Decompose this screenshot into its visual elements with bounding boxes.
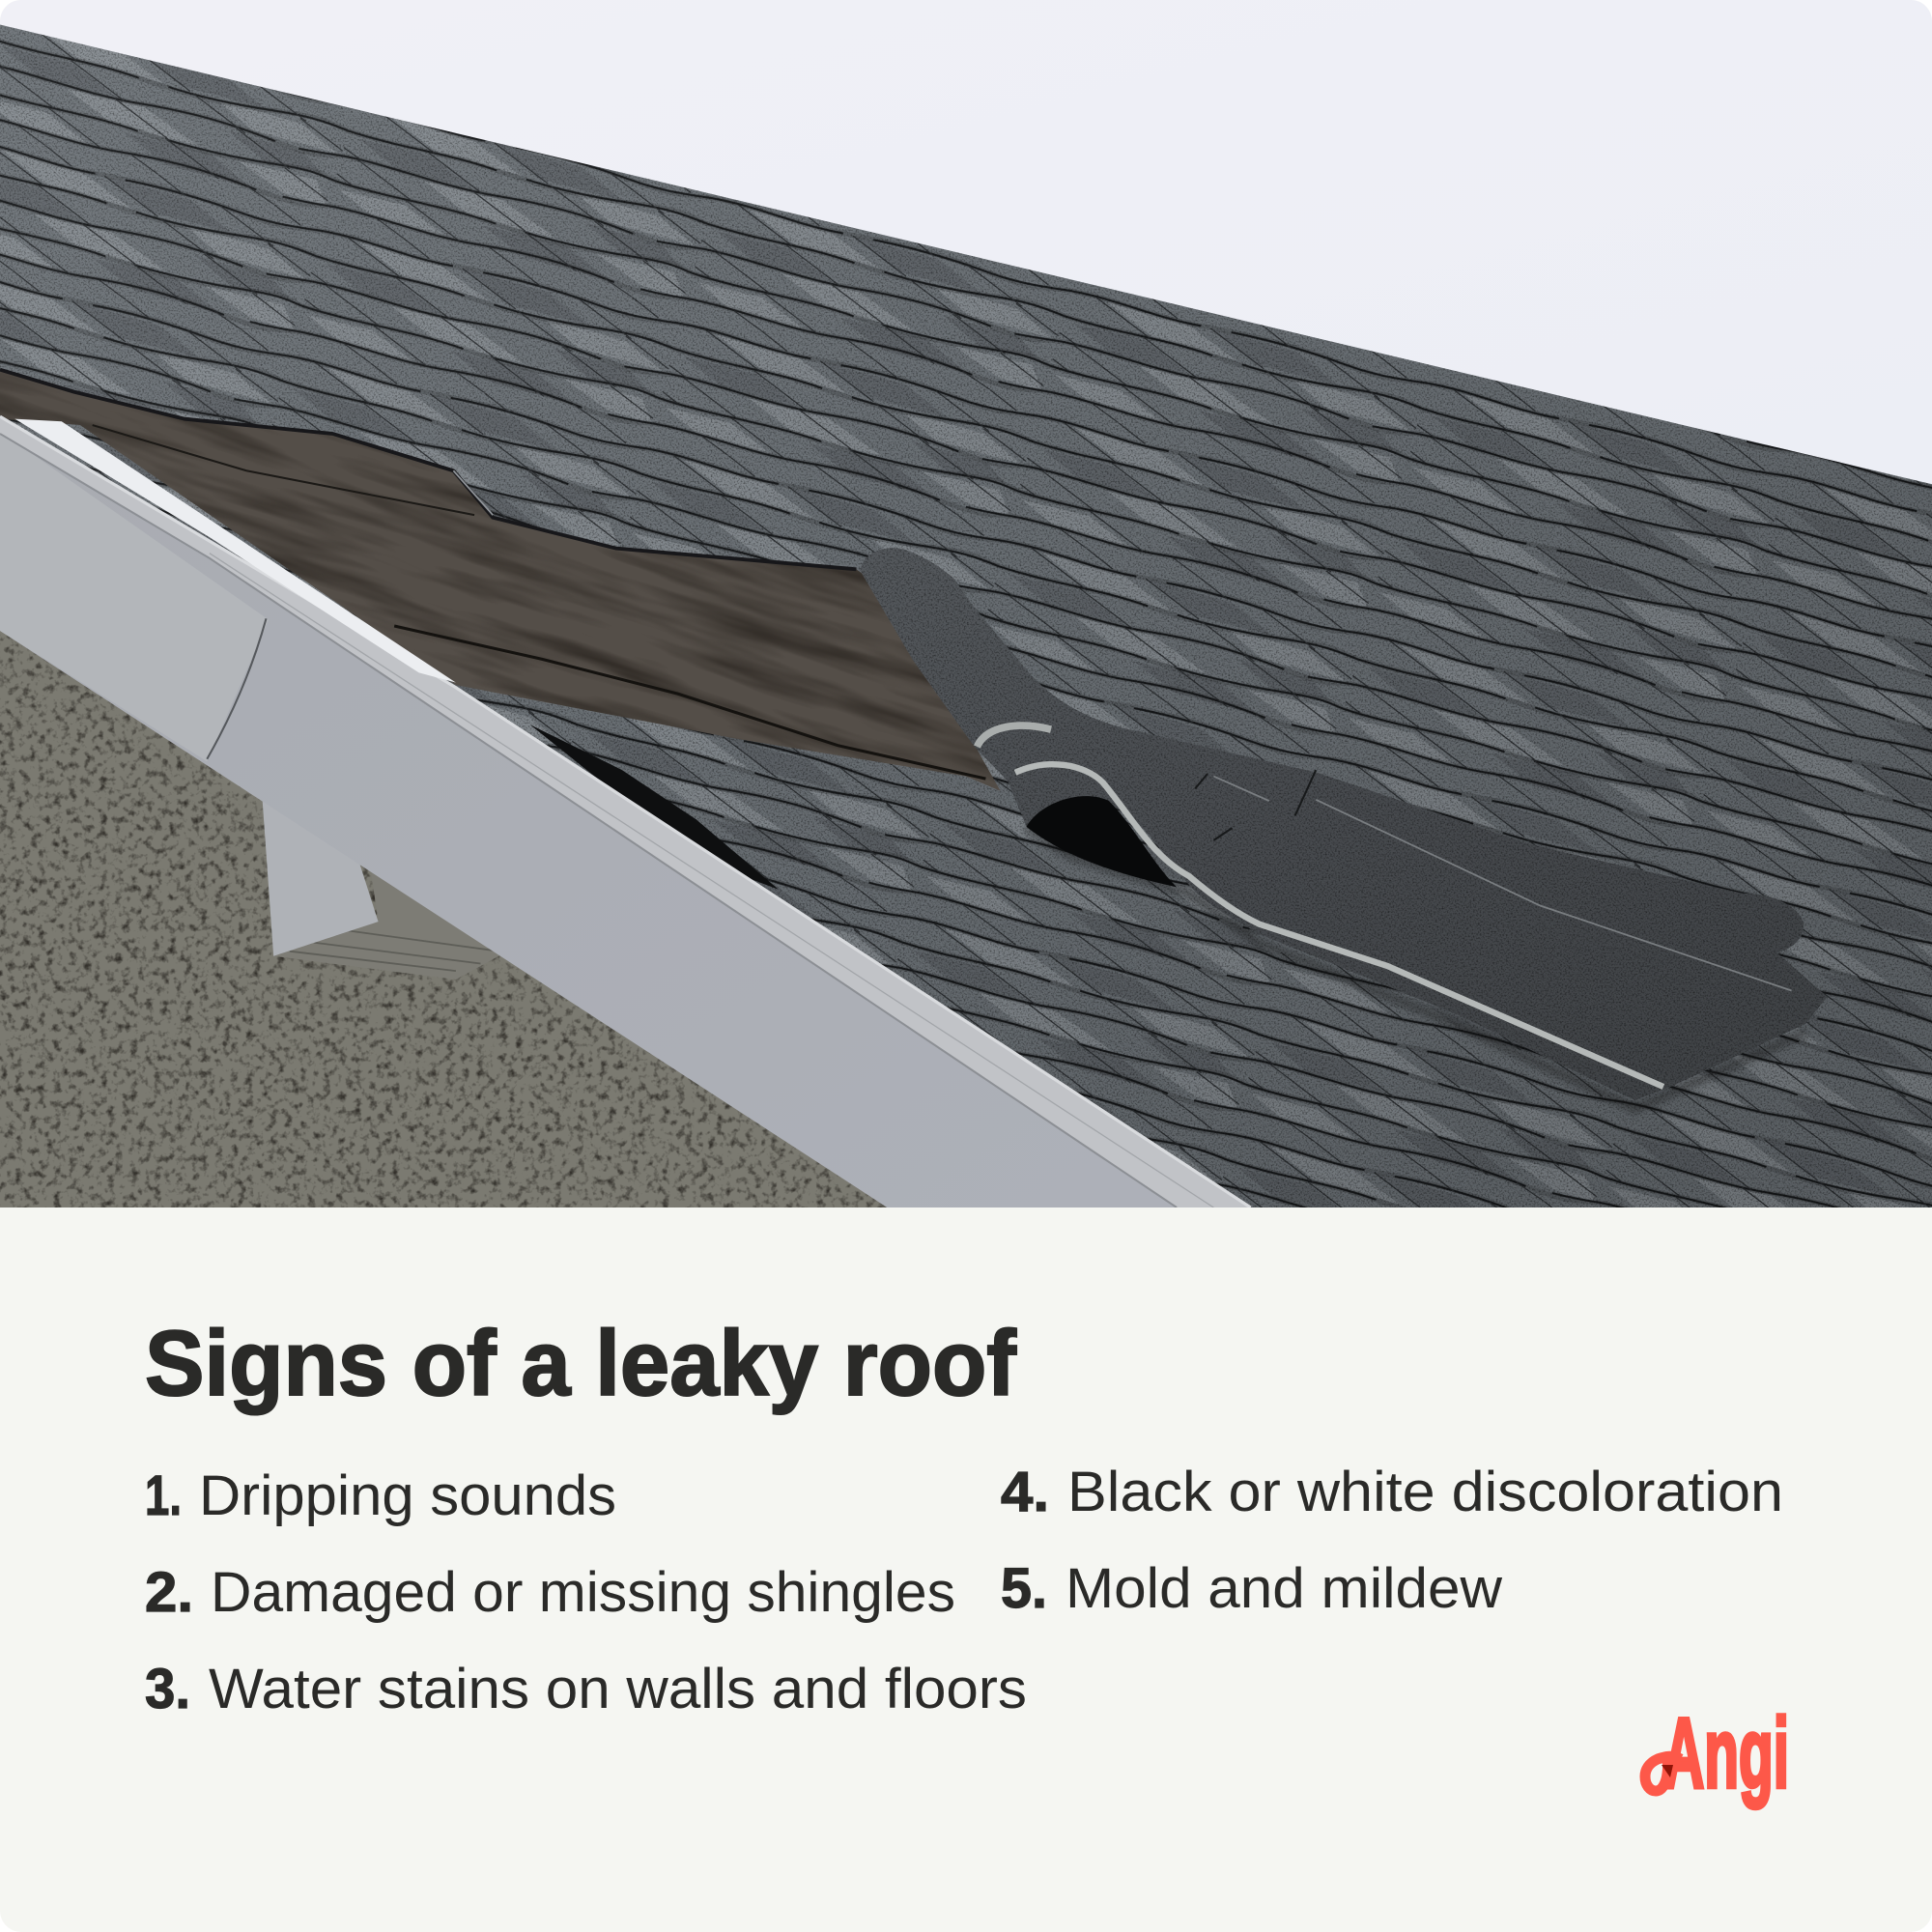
dark underside of curl: [1026, 796, 1177, 887]
loose curled shingle: [860, 548, 1828, 1100]
list item 5: 5.: [1001, 1557, 1047, 1620]
vent box under eave: [263, 801, 508, 980]
text panel: [145, 1312, 1789, 1810]
shadow under loose shingle: [1026, 828, 1805, 1109]
bright metal flashing: [14, 419, 456, 683]
Angi logo: [1645, 1697, 1789, 1808]
shingle roof: [0, 25, 1932, 1208]
pale sealant fragment: [977, 725, 1051, 747]
Angi logo: Angi: [1663, 1697, 1789, 1808]
gutter rim: [0, 416, 1251, 1208]
list item 1: 1.: [145, 1464, 182, 1527]
list item 4: Black or white discoloration: [1067, 1461, 1783, 1523]
scored line on shingle: [1213, 777, 1792, 991]
list item 2: Damaged or missing shingles: [211, 1561, 955, 1624]
torn gap in shingles: [529, 724, 779, 890]
scratch marks: [1195, 770, 1316, 840]
photo: damaged shingle roof: [0, 25, 1932, 1208]
list item 3: 3.: [145, 1658, 190, 1720]
fascia board: [0, 425, 1177, 1208]
sky: [0, 0, 1932, 518]
list item 4: 4.: [1001, 1461, 1049, 1523]
stucco wall: [0, 622, 899, 1208]
list item 3: Water stains on walls and floors: [209, 1658, 1027, 1720]
pale sealant strip: [1015, 764, 1663, 1087]
list item 5: Mold and mildew: [1065, 1557, 1503, 1620]
list item 1: Dripping sounds: [199, 1464, 616, 1527]
exposed brown underlayment: [0, 367, 1001, 791]
list item 2: 2.: [145, 1561, 193, 1624]
title: Signs of a leaky roof: [145, 1312, 1017, 1415]
